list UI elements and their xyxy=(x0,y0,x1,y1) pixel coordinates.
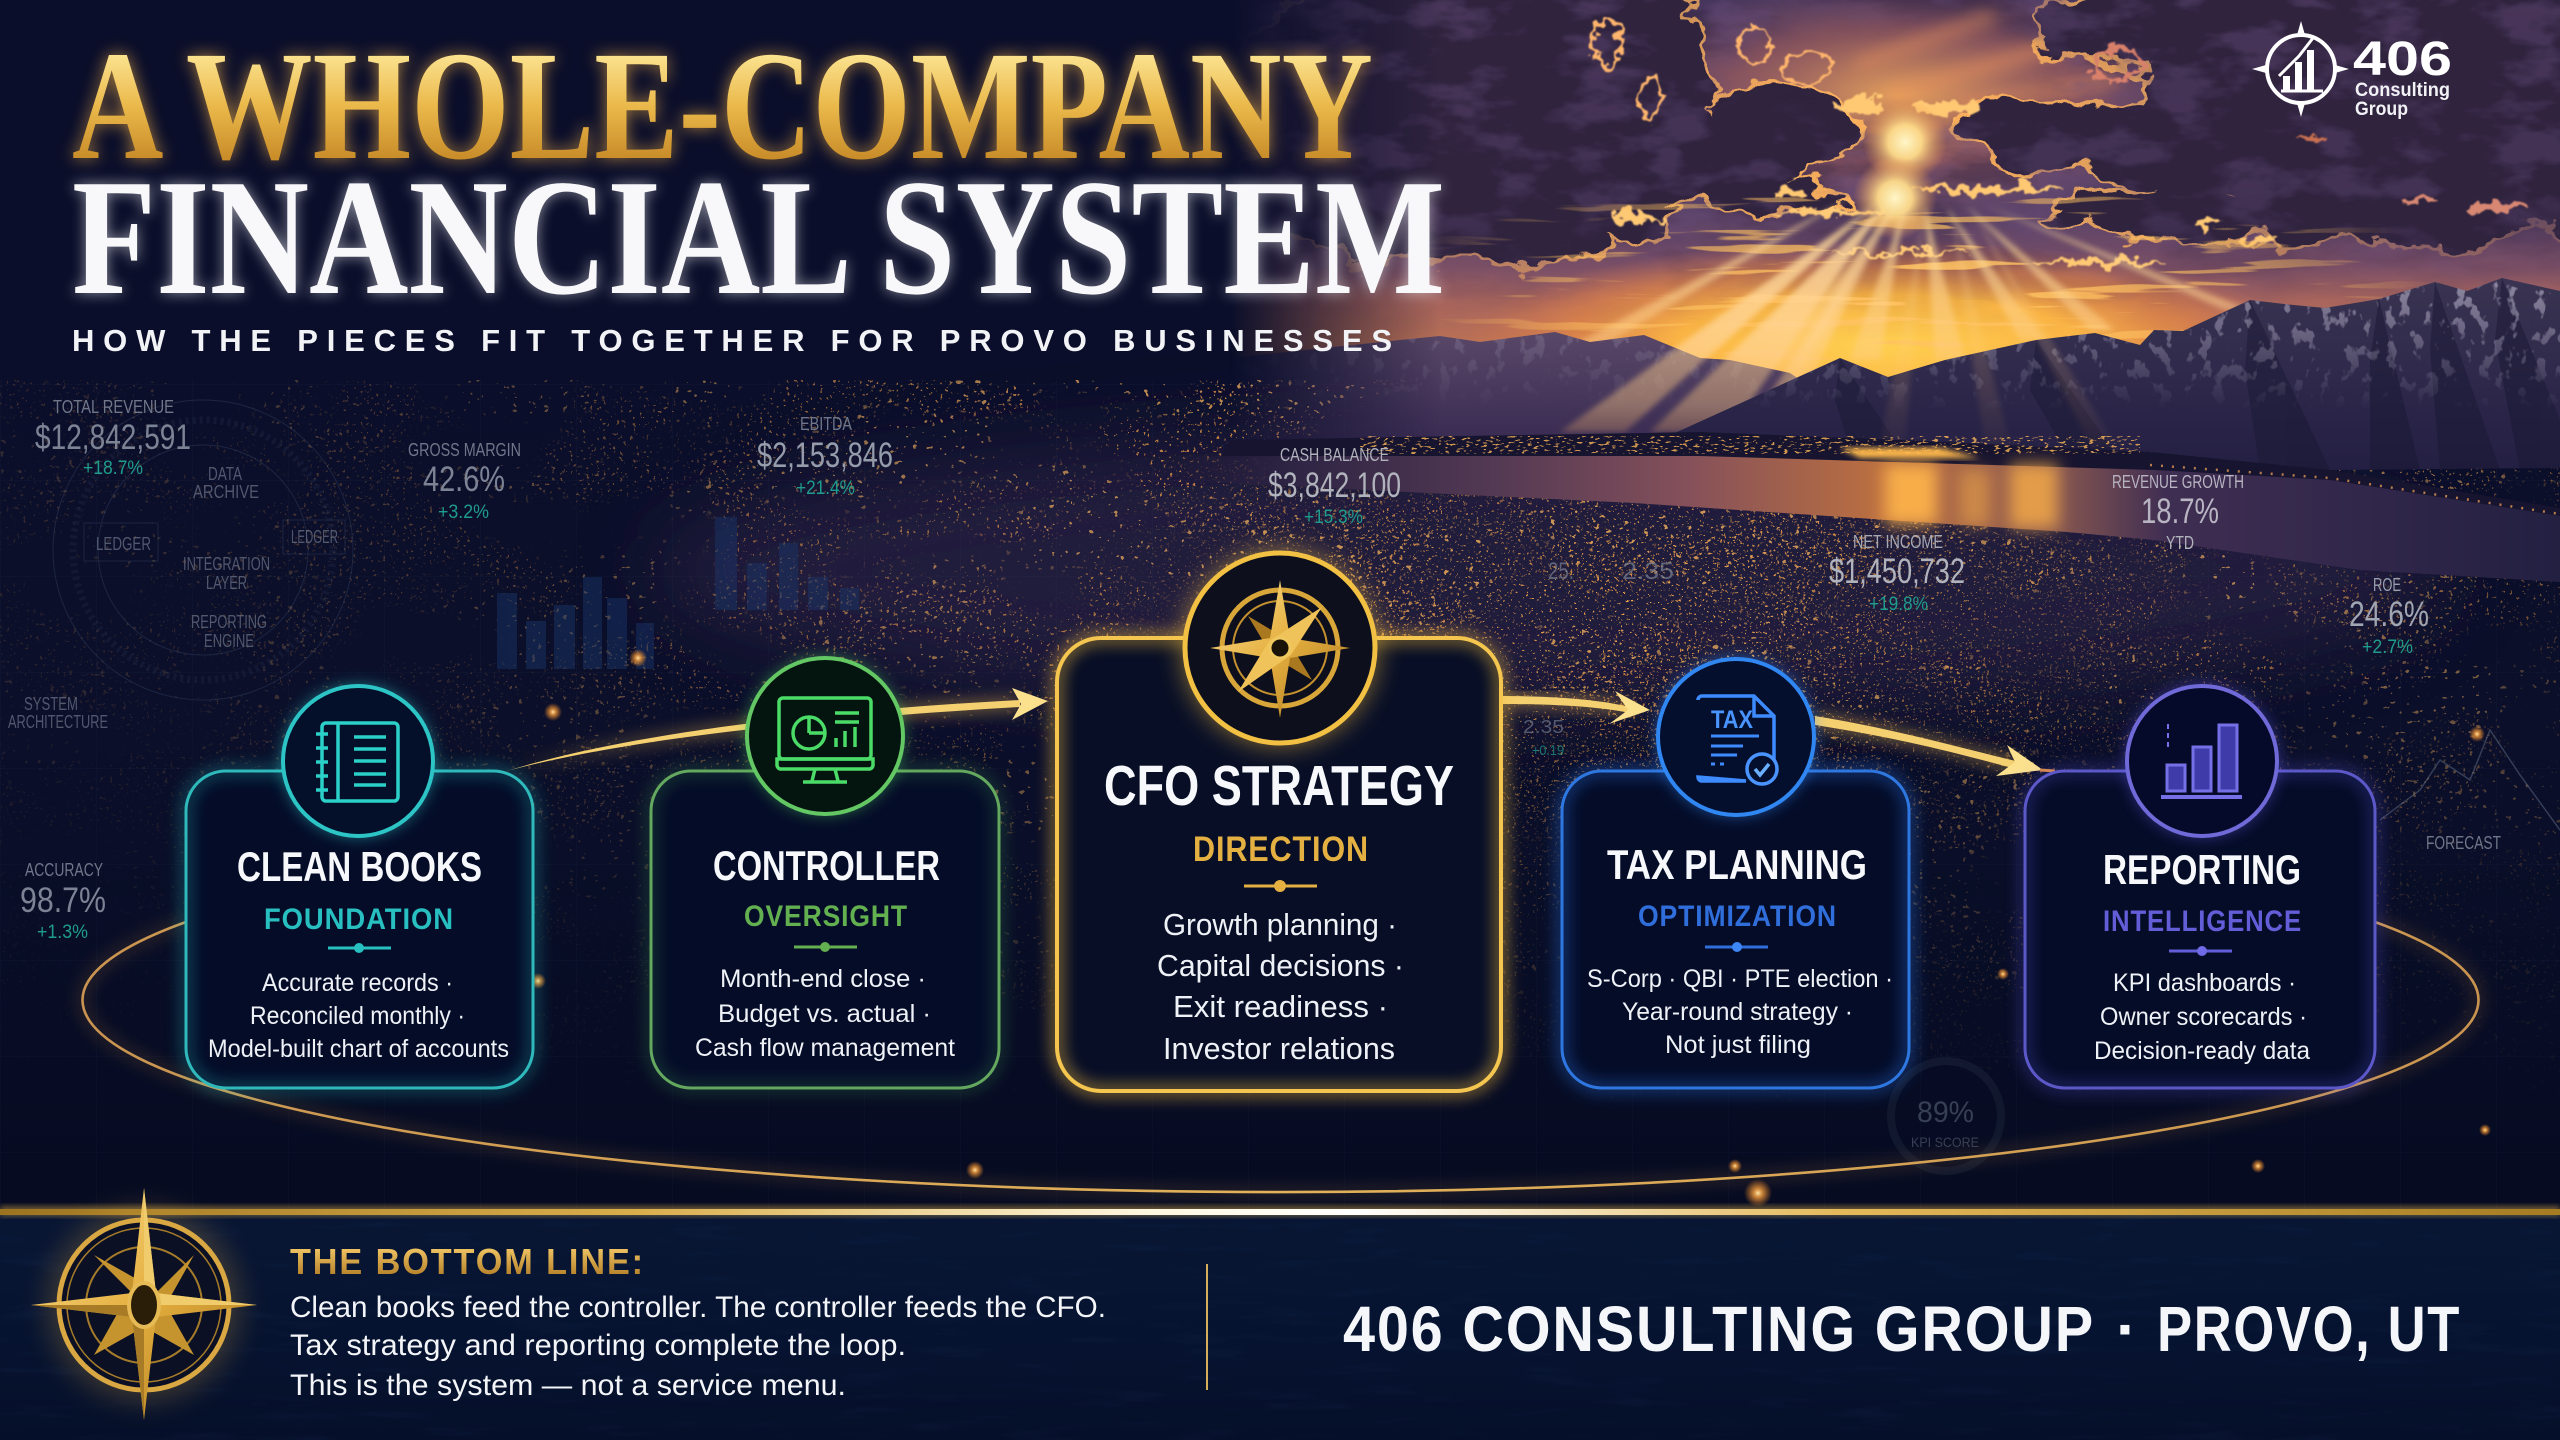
bullet list xyxy=(1157,907,1404,1066)
heading: the bottom line: THE BOTTOM LINE: xyxy=(290,1241,645,1282)
bullet list: Owner scorecards · xyxy=(2100,1003,2307,1031)
icon: tax document xyxy=(1658,659,1814,815)
ghost label: integration: INTEGRATION xyxy=(183,554,270,574)
company sign-off: PROVO, UT xyxy=(2157,1293,2461,1365)
bottom line text: Clean books feed the controller. The controller feeds the CFO. xyxy=(290,1291,1106,1324)
ghost label: ledger right: LEDGER xyxy=(291,527,338,547)
ghost numbers near the city: 2.35 xyxy=(1523,717,1564,737)
bottom line text xyxy=(290,1291,1106,1402)
rim lit cloud edges xyxy=(1200,0,2560,261)
label: oversight: OVERSIGHT xyxy=(744,900,908,933)
KPI metric: revenue growth xyxy=(2112,472,2244,553)
KPI metric: revenue growth: 18.7% xyxy=(2141,492,2219,531)
title line 2: FINANCIAL SYSTEM xyxy=(72,145,1445,329)
icon: gold compass rose xyxy=(31,1188,257,1420)
logo: 406 Consulting Group xyxy=(2252,21,2452,120)
KPI metric: net income: +19.8% xyxy=(1869,594,1928,615)
KPI metric: cash balance: $3,842,100 xyxy=(1268,466,1401,505)
KPI metric: revenue growth: YTD xyxy=(2166,533,2194,553)
KPI metric: net income: NET INCOME xyxy=(1853,532,1943,552)
cloud texture xyxy=(1296,0,2560,298)
sky rays xyxy=(1581,200,2242,376)
KPI metric: total revenue xyxy=(35,397,191,479)
ghost bar charts xyxy=(497,517,859,669)
bullet list xyxy=(695,965,955,1062)
panel: clean books xyxy=(186,686,533,1088)
ghost numbers near the city xyxy=(1523,558,1674,758)
label: optimization: OPTIMIZATION xyxy=(1638,900,1837,933)
bullet list xyxy=(2094,969,2310,1065)
ornament divider xyxy=(794,942,857,952)
bullet list: Cash flow management xyxy=(695,1034,955,1062)
ghost label: reporting: REPORTING xyxy=(191,612,267,632)
ornament divider xyxy=(1244,880,1317,892)
bullet list: Not just filing xyxy=(1665,1031,1811,1059)
icon: tax document: TAX xyxy=(1711,706,1753,734)
ghost label: forecast: FORECAST xyxy=(2426,833,2501,853)
bullet list: Capital decisions · xyxy=(1157,948,1404,983)
dark cumulus xyxy=(1200,0,2560,261)
background: dusk landscape over a dark navy city xyxy=(0,0,2560,1074)
city lights xyxy=(0,380,2560,1078)
bullet list xyxy=(208,969,509,1063)
ghost gauge: KPI score xyxy=(1891,1061,2001,1171)
ghost label: archive: ARCHIVE xyxy=(193,482,259,502)
far shore xyxy=(1220,432,2560,525)
bullet list: Investor relations xyxy=(1163,1031,1395,1066)
bokeh light spots xyxy=(530,649,2491,1207)
icon: compass xyxy=(1185,553,1375,743)
label: intelligence: INTELLIGENCE xyxy=(2103,905,2302,938)
lake xyxy=(1160,456,2560,582)
ornament divider xyxy=(2169,946,2232,956)
KPI metric: gross margin: +3.2% xyxy=(438,502,489,523)
ghost numbers near the city: 2.35 xyxy=(1622,558,1674,585)
KPI metric: ROE: ROE xyxy=(2373,575,2401,595)
heading: tax planning: TAX PLANNING xyxy=(1607,841,1867,888)
bottom line text: This is the system — not a service menu. xyxy=(290,1369,846,1402)
ornament divider xyxy=(328,943,391,953)
panel: tax planning xyxy=(1562,659,1909,1088)
footer band xyxy=(0,1188,2560,1440)
KPI metric: ROE: 24.6% xyxy=(2349,595,2429,634)
KPI metric: net income xyxy=(1829,532,1965,615)
bullet list: Growth planning · xyxy=(1163,907,1397,942)
ghost label: ledger left: LEDGER xyxy=(96,534,151,554)
KPI metric: cash balance xyxy=(1268,445,1401,528)
company sign-off: · xyxy=(2116,1293,2137,1365)
ornament divider xyxy=(1705,942,1768,952)
KPI metric: revenue growth: REVENUE GROWTH xyxy=(2112,472,2244,492)
ghost numbers near the city: +0.19 xyxy=(1532,742,1564,758)
logo: 406 Consulting Group: Consulting xyxy=(2355,80,2450,101)
bullet list: KPI dashboards · xyxy=(2113,969,2296,997)
label: direction: DIRECTION xyxy=(1193,830,1369,869)
heading: CFO strategy: CFO STRATEGY xyxy=(1104,754,1454,818)
dark noise clouds xyxy=(1442,0,2560,314)
KPI metric: total revenue: TOTAL REVENUE xyxy=(53,397,174,417)
panel: controller xyxy=(651,658,999,1088)
bullet list: Accurate records · xyxy=(262,969,453,997)
ghost gauge: KPI score: KPI SCORE xyxy=(1911,1134,1979,1150)
KPI metric: EBITDA: $2,153,846 xyxy=(757,436,893,475)
icon: notebook xyxy=(283,686,433,836)
KPI metric: gross margin xyxy=(408,440,521,523)
KPI metric: gross margin: 42.6% xyxy=(423,460,505,499)
heading: clean books: CLEAN BOOKS xyxy=(237,843,482,890)
subtitle: HOW THE PIECES FIT TOGETHER FOR PROVO BUSINESSES xyxy=(72,323,1392,358)
shore lights xyxy=(1360,436,2560,514)
logo: 406 Consulting Group: 406 xyxy=(2353,33,2452,86)
ghost numbers near the city: 25. xyxy=(1548,558,1574,585)
label: foundation: FOUNDATION xyxy=(264,903,454,936)
bullet list: Decision-ready data xyxy=(2094,1037,2310,1065)
horizon cloud streaks xyxy=(1436,190,2413,360)
KPI metric: EBITDA: EBITDA xyxy=(800,414,852,434)
ghost label: layer: LAYER xyxy=(206,573,247,593)
far mountain range xyxy=(1230,320,1840,440)
ghost label: system: SYSTEM xyxy=(24,694,78,714)
bullet list: Budget vs. actual · xyxy=(718,1000,931,1028)
rays over the mountains xyxy=(1880,205,2115,445)
title line 1: A WHOLE-COMPANY xyxy=(72,19,1373,192)
ghost label: engine: ENGINE xyxy=(204,631,254,651)
KPI metric: total revenue: $12,842,591 xyxy=(35,418,191,457)
KPI metric: accuracy xyxy=(20,860,106,943)
bullet list: Reconciled monthly · xyxy=(250,1002,465,1030)
bullet list xyxy=(1587,965,1893,1059)
ghost gauge: KPI score: 89% xyxy=(1917,1096,1974,1129)
company sign-off: 406 CONSULTING GROUP xyxy=(1343,1293,2095,1365)
logo: 406 Consulting Group: Group xyxy=(2355,99,2408,120)
purple city haze xyxy=(650,430,2450,710)
flow arrow: tax planning to reporting xyxy=(1815,716,2055,776)
flow arrow: CFO to tax planning xyxy=(1500,691,1650,724)
bullet list: S-Corp · QBI · PTE election · xyxy=(1587,965,1893,993)
KPI metric: ROE: +2.7% xyxy=(2362,637,2413,658)
dense downtown lights xyxy=(1052,440,2249,860)
KPI metric: total revenue: +18.7% xyxy=(83,458,143,479)
heading: reporting: REPORTING xyxy=(2103,846,2301,893)
bottom line text: Tax strategy and reporting complete the loop. xyxy=(290,1329,906,1362)
bullet list: Year-round strategy · xyxy=(1622,998,1853,1026)
KPI metric: net income: $1,450,732 xyxy=(1829,552,1965,591)
rays on the far range xyxy=(1560,205,1895,432)
orange streaks in the gap xyxy=(1850,10,2120,110)
gold rule xyxy=(0,1206,2560,1216)
bright sunlit cloud breaks xyxy=(1595,21,2521,265)
sunset sky xyxy=(1240,0,2560,440)
panel: CFO strategy xyxy=(1057,553,1501,1091)
front mountain range xyxy=(1660,275,2560,475)
KPI metric: EBITDA: +21.4% xyxy=(796,478,855,499)
bullet list: Exit readiness · xyxy=(1173,989,1388,1024)
KPI metric: ROE xyxy=(2349,575,2429,658)
flow arrow: clean books to CFO xyxy=(507,688,1048,771)
KPI metric: accuracy: 98.7% xyxy=(20,881,106,920)
ghost architecture diagram xyxy=(8,400,353,732)
ghost label: data archive: DATA xyxy=(208,464,242,484)
KPI metric: EBITDA xyxy=(757,414,893,499)
KPI metric: cash balance: CASH BALANCE xyxy=(1280,445,1389,465)
heading: controller: CONTROLLER xyxy=(713,842,940,889)
vertical divider xyxy=(1206,1264,1208,1390)
KPI metric: cash balance: +15.3% xyxy=(1304,507,1363,528)
panel: reporting xyxy=(2025,686,2375,1088)
orbit loop ellipse xyxy=(82,922,2478,1192)
KPI metric: accuracy: +1.3% xyxy=(37,922,88,943)
bullet list: Month-end close · xyxy=(720,965,926,993)
KPI metric: gross margin: GROSS MARGIN xyxy=(408,440,521,460)
icon: bar chart xyxy=(2127,686,2277,836)
KPI metric: accuracy: ACCURACY xyxy=(25,860,103,880)
icon: monitor dashboard xyxy=(747,658,903,814)
bullet list: Model-built chart of accounts xyxy=(208,1035,509,1063)
ghost forecast line chart xyxy=(2380,730,2560,830)
ghost grid xyxy=(0,380,2560,1210)
ghost label: architecture: ARCHITECTURE xyxy=(8,712,108,732)
